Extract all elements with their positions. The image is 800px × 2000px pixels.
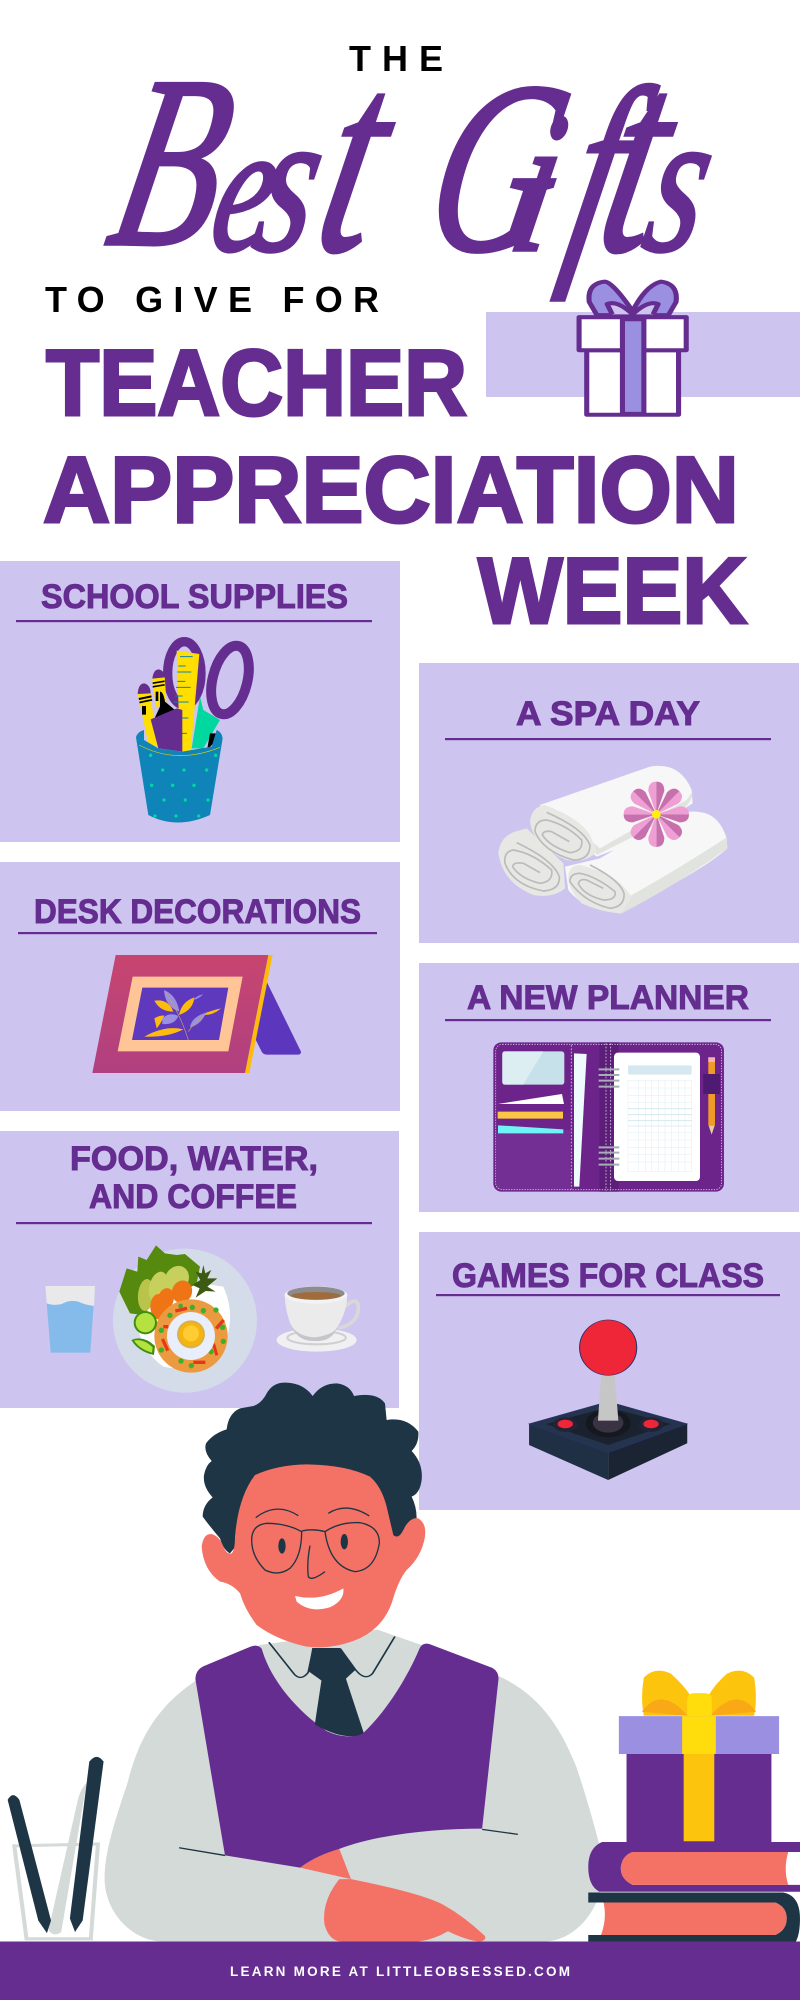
body and desk objects xyxy=(8,1630,800,1942)
stack of books xyxy=(588,1842,800,1942)
heading: food, water, and coffee: FOOD, WATER, xyxy=(70,1140,318,1178)
icon: coffee cup xyxy=(277,1286,358,1352)
smile xyxy=(295,1588,343,1609)
heading: food, water, and coffee xyxy=(70,1140,318,1216)
title: to give for: TO GIVE FOR xyxy=(45,279,379,320)
gift box on books xyxy=(619,1671,779,1842)
eyes xyxy=(278,1534,348,1554)
glasses, nose and brows xyxy=(252,1508,379,1578)
title: best gifts: f xyxy=(549,41,669,301)
icon: water glass xyxy=(45,1286,95,1353)
icon: pencil cup xyxy=(136,642,255,822)
icon: open planner xyxy=(493,1042,724,1192)
collar and sleeve lines xyxy=(179,1637,518,1855)
necktie xyxy=(308,1648,364,1736)
icon: joystick xyxy=(529,1320,687,1480)
footer bar xyxy=(0,1942,800,2000)
icon: gift box outline xyxy=(579,282,686,415)
heading: a new planner: A NEW PLANNER xyxy=(467,979,749,1017)
heading: a spa day: A SPA DAY xyxy=(516,695,700,733)
title: week: WEEK xyxy=(478,538,747,643)
heading: school supplies: SCHOOL SUPPLIES xyxy=(41,578,348,616)
icon: plate of food xyxy=(113,1245,257,1393)
sweater vest xyxy=(195,1644,499,1868)
panel: games for class xyxy=(419,1232,800,1510)
footer text: LEARN MORE AT LITTLEOBSESSED.COM xyxy=(230,1964,570,1979)
title: best gifts: B xyxy=(92,27,254,298)
heading: games for class: GAMES FOR CLASS xyxy=(452,1257,764,1295)
title: teacher: TEACHER xyxy=(46,330,467,435)
illustration: teacher at desk xyxy=(8,1383,800,1942)
panel: desk decorations xyxy=(0,862,400,1111)
shirt xyxy=(105,1630,603,1942)
panel: food, water and coffee xyxy=(0,1131,399,1408)
forearm and hand xyxy=(300,1849,485,1942)
flower xyxy=(624,782,689,847)
title: best gifts: t xyxy=(579,6,702,310)
title: the: THE xyxy=(349,38,443,79)
icon: picture frame xyxy=(92,955,301,1073)
heading: desk decorations: DESK DECORATIONS xyxy=(34,893,361,931)
title: best gifts: G xyxy=(409,33,590,304)
panel: a spa day xyxy=(419,663,799,943)
top accent strip xyxy=(486,312,800,397)
head xyxy=(202,1383,425,1647)
title: best gifts: t xyxy=(297,6,420,310)
icon: rolled towels with flower xyxy=(498,766,727,913)
title: best gifts: i xyxy=(497,72,583,293)
panel: a new planner xyxy=(419,963,799,1212)
title: best gifts: s xyxy=(630,67,734,295)
heading: food, water, and coffee: AND COFFEE xyxy=(89,1178,297,1216)
title: best gifts: s xyxy=(240,67,344,295)
face and ears xyxy=(202,1464,425,1647)
title: best gifts: e xyxy=(197,87,298,291)
pens in a glass xyxy=(8,1757,104,1939)
hair xyxy=(203,1383,422,1553)
title: appreciation: APPRECIATION xyxy=(43,437,739,542)
panel: school supplies xyxy=(0,561,400,842)
